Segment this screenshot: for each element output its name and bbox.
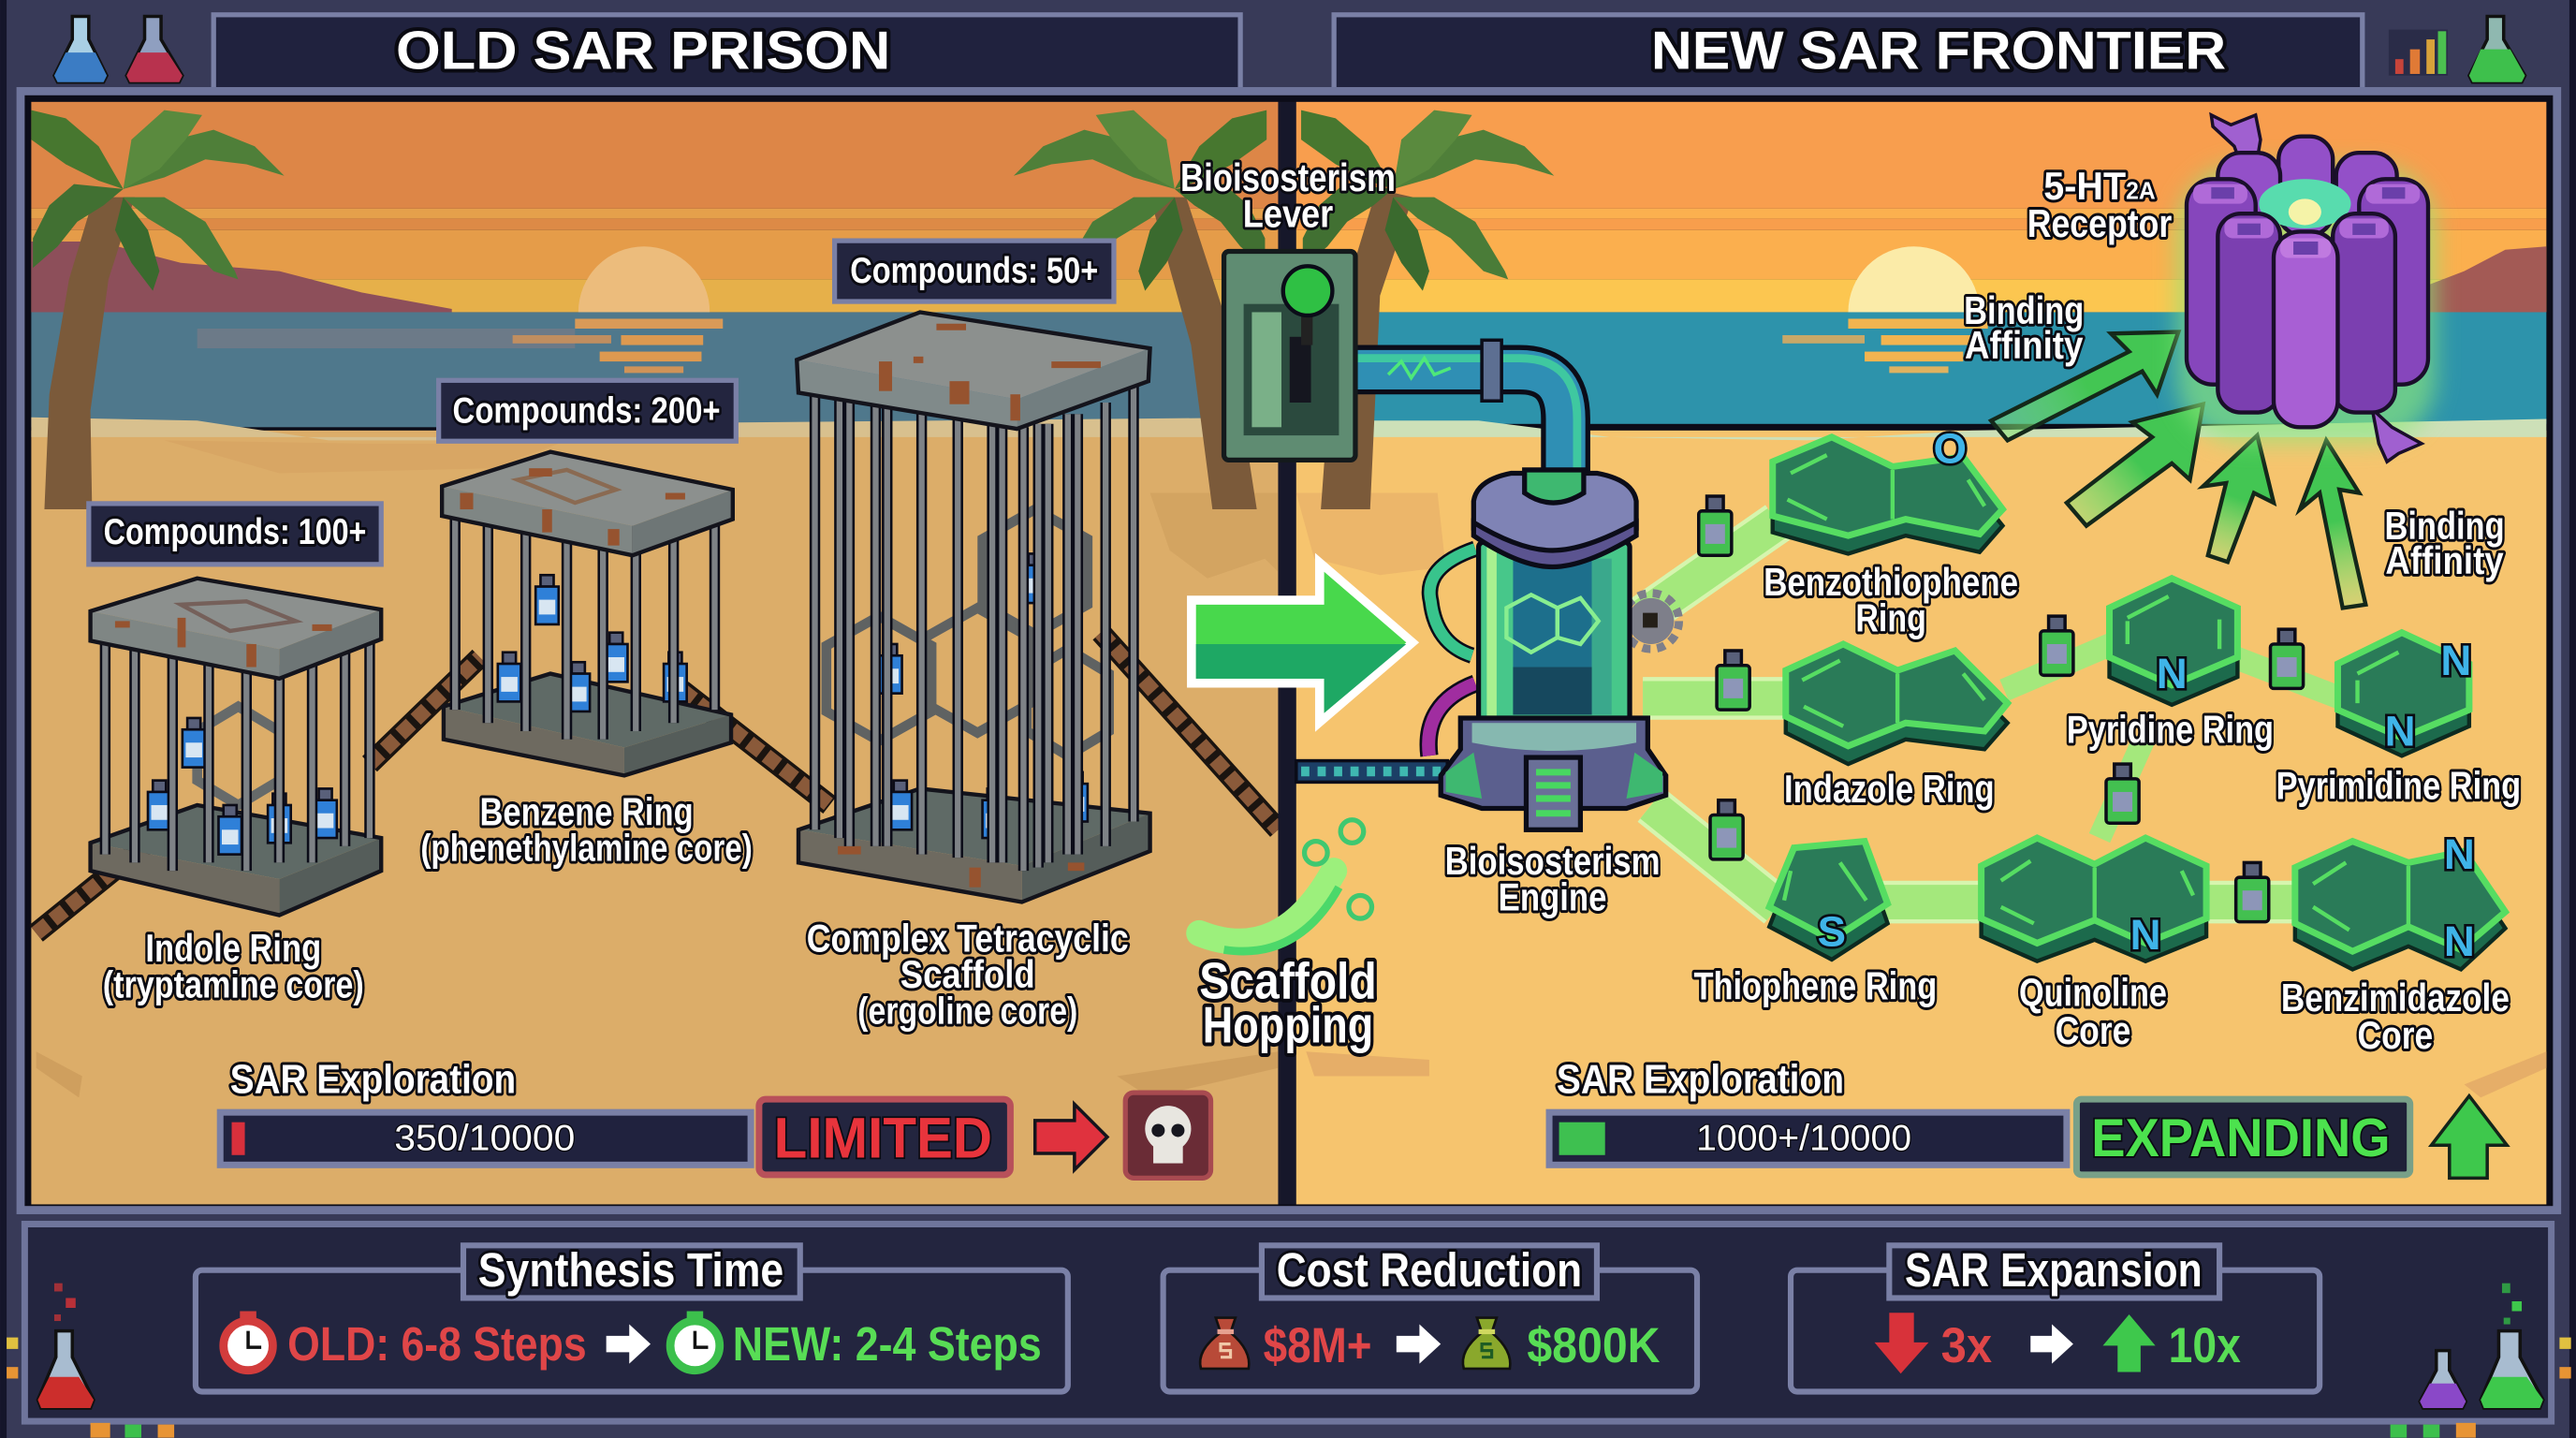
icon: green flask [2469, 17, 2525, 82]
arrow: white [2030, 1325, 2073, 1364]
caption: benzimidazole [2281, 976, 2510, 1057]
panel: old SAR prison scene [31, 102, 1281, 1204]
sea [31, 312, 1278, 427]
pipe from lever to engine [1355, 340, 1577, 493]
cage base [798, 788, 1150, 902]
arrow: binding affinity 4 [2300, 440, 2365, 608]
progress: old SAR exploration [220, 1057, 751, 1165]
caption: benzothiophene [1764, 560, 2018, 639]
title: old SAR prison: OLD SAR PRISON [396, 21, 890, 81]
ring: benzothiophene [1773, 425, 2002, 553]
arrow: white [607, 1325, 651, 1364]
caption: tetracyclic scaffold: (ergoline core) [857, 989, 1077, 1032]
caption: benzene ring [420, 789, 753, 870]
icon: red flask with bubbles [37, 1284, 94, 1408]
metric: cost reduction [1164, 1243, 1697, 1392]
swirl [1199, 820, 1372, 951]
palm tree [1301, 110, 1554, 509]
bioisosterism engine [1428, 470, 1679, 829]
status badge: limited: LIMITED [774, 1107, 992, 1171]
metric: synthesis time: OLD: 6-8 Steps [287, 1317, 587, 1371]
compound count label: 100+: Compounds: 100+ [104, 512, 366, 552]
sea [1296, 312, 2546, 424]
caption: pyrimidine: Pyrimidine Ring [2276, 763, 2521, 807]
status lights [7, 1338, 2571, 1438]
arrow: binding affinity 2 [2067, 404, 2203, 526]
caption: lever: Bioisosterism [1180, 155, 1396, 199]
receptor tail [2372, 409, 2422, 462]
cage top slab [442, 452, 733, 555]
metric: SAR expansion [1791, 1243, 2320, 1392]
caption: pyridine: Pyridine Ring [2067, 708, 2274, 752]
icon: green flask with bubbles [2481, 1284, 2543, 1408]
metric: synthesis time [196, 1243, 1068, 1392]
cage top slab [91, 579, 381, 679]
cage base [91, 805, 381, 916]
icon: green stopwatch [670, 1312, 720, 1371]
mountain [31, 242, 452, 312]
sunset sky [1296, 102, 2546, 312]
icon: red flask [126, 17, 183, 82]
panel: metrics footer [24, 1224, 2552, 1421]
palm tree left [31, 110, 285, 509]
oxygen atom: O [1934, 425, 1967, 473]
scaffold hopping caption [1199, 952, 1377, 1054]
caption: binding affinity right [2384, 504, 2505, 582]
receptor glow [2176, 165, 2437, 444]
caption: binding affinity top [1964, 288, 2084, 367]
gene vials [1699, 496, 2304, 922]
glass chamber [1479, 542, 1630, 723]
metric: cost reduction: $800K [1527, 1318, 1661, 1373]
cage bars [815, 386, 1134, 871]
tube [1430, 549, 1475, 655]
arrow: white [1397, 1325, 1441, 1364]
nitrogen atoms: N [2444, 917, 2475, 965]
icon: red money bag [1200, 1318, 1249, 1369]
metric: SAR expansion: SAR Expansion [1905, 1243, 2203, 1297]
caption: receptor: 2A [2126, 177, 2156, 205]
chains [37, 633, 1278, 933]
mountain [2422, 246, 2546, 312]
icon: skull [1125, 1093, 1211, 1178]
progress: old SAR exploration: SAR Exploration [230, 1057, 516, 1103]
hologram molecule [1506, 594, 1599, 653]
trapped vials [498, 575, 687, 712]
cage: benzene ring [442, 452, 733, 775]
caption: quinoline: Core [2056, 1008, 2130, 1052]
arrow: green up [2431, 1096, 2507, 1178]
captions [1180, 155, 2521, 1057]
metric: cost reduction: Cost Reduction [1277, 1243, 1582, 1297]
progress: new SAR exploration: 1000+/10000 [1696, 1119, 1911, 1159]
caption: binding affinity right: Affinity [2385, 538, 2504, 582]
icon: red stopwatch [224, 1312, 272, 1371]
arrow: binding affinity 1 [1991, 332, 2178, 440]
caption: receptor [2027, 164, 2172, 245]
header: new SAR frontier title bar [1334, 15, 2363, 91]
energy channels [1643, 522, 2341, 907]
cage: indole ring [91, 579, 381, 916]
helix barrels [2217, 137, 2397, 235]
ring: benzimidazole [2295, 830, 2505, 969]
progress: new SAR exploration [1549, 1057, 2067, 1165]
nitrogen atoms: N [2440, 637, 2471, 684]
caption: indazole: Indazole Ring [1784, 767, 1995, 811]
metric: cost reduction: $8M+ [1264, 1318, 1372, 1373]
caption: benzimidazole: Core [2358, 1013, 2433, 1057]
caption: benzimidazole: Benzimidazole [2281, 976, 2510, 1020]
caption: tetracyclic scaffold: Scaffold [900, 952, 1035, 996]
caption: thiophene: Thiophene Ring [1693, 964, 1937, 1008]
base [1441, 718, 1666, 829]
caption: binding affinity top: Binding [1964, 288, 2084, 332]
caption: receptor: Receptor [2027, 201, 2172, 245]
lever panel [1224, 252, 1355, 460]
trapped vials [879, 553, 1088, 838]
ring: indazole [1786, 644, 2008, 764]
panel frame [21, 91, 2557, 1211]
nitrogen atoms [2385, 637, 2471, 755]
caption: lever: Lever [1243, 192, 1333, 236]
caption: tetracyclic scaffold: Complex Tetracyclic [807, 917, 1129, 961]
metric: SAR expansion: 10x [2169, 1318, 2241, 1373]
ring: pyridine [2110, 579, 2237, 705]
sunset sky [31, 102, 1278, 312]
compound count label: 50+ [835, 241, 1114, 301]
metric: synthesis time: NEW: 2-4 Steps [733, 1317, 1042, 1371]
caption: benzothiophene: Ring [1855, 595, 1926, 639]
compound count label: 100+ [89, 504, 381, 565]
compound count label: 200+: Compounds: 200+ [453, 390, 721, 431]
cage: tetracyclic scaffold [797, 312, 1150, 902]
ring: thiophene [1769, 842, 1888, 960]
arrow: binding affinity 3 [2203, 435, 2274, 562]
caption: receptor: 5-HT [2043, 164, 2131, 208]
nitrogen atoms: N [2385, 707, 2416, 755]
caption: engine: Bioisosterism [1445, 839, 1661, 883]
scaffold hopping [1199, 820, 1377, 1054]
nitrogen atoms: N [2444, 830, 2475, 878]
icon: green money bag [1463, 1318, 1510, 1369]
nitrogen atom: N [2157, 650, 2188, 697]
receptor top ear [2211, 115, 2261, 169]
progress: new SAR exploration: SAR Exploration [1557, 1057, 1844, 1103]
transfer arrows into receptor [1991, 332, 2365, 608]
cage bars [105, 624, 370, 871]
feed pipe [1296, 761, 1447, 782]
barrel caps [2193, 184, 2420, 258]
compound count label: 200+ [439, 380, 736, 441]
caption: binding affinity top: Affinity [1965, 323, 2084, 367]
icon: purple flask [2420, 1351, 2466, 1408]
icon: blue flask [54, 17, 107, 82]
nitrogen atom: N [2130, 911, 2161, 959]
cage top slab [797, 312, 1150, 429]
metric: SAR expansion: 3x [1941, 1318, 1992, 1373]
status badge: expanding: EXPANDING [2091, 1108, 2391, 1168]
glowing binding pocket [2259, 179, 2351, 228]
caption: lever [1180, 155, 1396, 236]
header: old SAR prison title bar [213, 15, 1240, 91]
sand beach [1296, 419, 2546, 1204]
lever knob [1283, 266, 1332, 315]
top cap [1473, 470, 1636, 566]
caption: benzene ring: Benzene Ring [480, 789, 694, 833]
scaffold hopping caption: Hopping [1203, 997, 1373, 1054]
caption: indole ring: Indole Ring [145, 926, 321, 970]
caption: engine [1445, 839, 1661, 919]
caption: binding affinity right: Binding [2384, 504, 2505, 548]
setting sun [578, 246, 710, 312]
sand beach [31, 418, 1281, 1204]
arrow: red down [1875, 1313, 1928, 1373]
palm tree right [1014, 110, 1266, 509]
metric: synthesis time: Synthesis Time [478, 1243, 783, 1297]
divider between scenes [1278, 102, 1296, 1204]
sulfur atom: S [1818, 908, 1846, 956]
cage base [444, 674, 731, 775]
caption: indole ring [103, 926, 364, 1005]
nitrogen atoms [2444, 830, 2475, 965]
caption: engine: Engine [1499, 875, 1606, 919]
panel: new SAR frontier scene [1180, 102, 2546, 1204]
receptor: 5-HT2A [2176, 115, 2437, 462]
compound count label: 50+: Compounds: 50+ [850, 251, 1098, 291]
ghost tetracyclic rings [827, 509, 1109, 756]
ghost ring [198, 707, 279, 805]
caption: benzothiophene: Benzothiophene [1764, 560, 2018, 604]
ring: pyrimidine [2337, 633, 2471, 756]
progress: old SAR exploration: 350/10000 [394, 1119, 575, 1159]
setting sun [1848, 246, 1980, 312]
caption: quinoline [2019, 971, 2167, 1052]
icon: small bar chart [2389, 30, 2448, 76]
caption: tetracyclic scaffold [807, 917, 1129, 1032]
scaffold hopping caption: Scaffold [1199, 952, 1377, 1009]
cage bars [455, 501, 714, 740]
arrow: green up [2102, 1314, 2156, 1372]
caption: benzene ring: (phenethylamine core) [420, 827, 753, 870]
ring: quinoline [1982, 838, 2206, 961]
title: new SAR frontier: NEW SAR FRONTIER [1651, 21, 2226, 81]
caption: indole ring: (tryptamine core) [103, 962, 364, 1005]
gear [1623, 594, 1679, 649]
front barrels [2187, 179, 2428, 427]
trapped vials [148, 718, 337, 855]
arrow: red to skull [1035, 1104, 1107, 1170]
caption: quinoline: Quinoline [2019, 971, 2167, 1015]
big green transition arrow [1191, 562, 1412, 723]
